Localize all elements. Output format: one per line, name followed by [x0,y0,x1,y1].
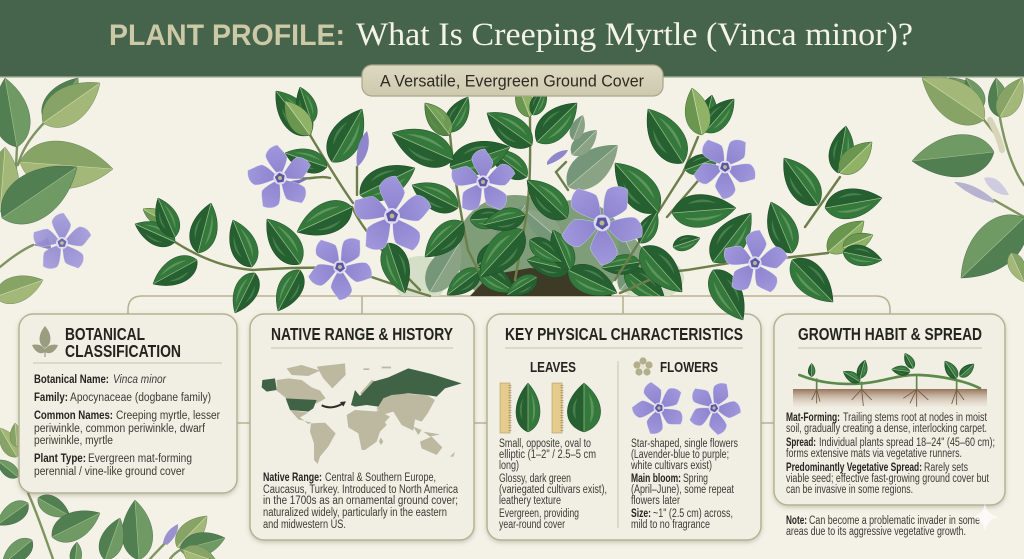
icon: leaf sprig [30,326,60,357]
text: leaves description: long) [499,460,519,472]
subheading: flowers: FLOWERS [660,359,718,376]
text: classification facts: Common Names: [34,410,113,422]
heading [65,324,181,361]
text: growth facts: can be invasive in some regions. [786,484,913,496]
text: flowers description: ~1" (2.5 cm) across, [653,508,733,520]
connector lines [128,296,890,423]
text: leaves description: Glossy, dark green [499,473,571,485]
subheading: leaves: LEAVES [530,359,576,376]
heading: CLASSIFICATION [65,341,181,361]
text: classification facts: Evergreen mat-forming [88,453,192,465]
panel: key physical characteristics [487,314,761,540]
title: PLANT PROFILE: [109,19,345,52]
text: classification facts: Family: [34,392,68,404]
text: flowers description: mild to no fragrance [631,519,710,531]
text: growth facts: Mat-Forming: [786,412,840,424]
text: leaves description: Small, opposite, oval to [499,438,591,450]
text: classification facts: Apocynaceae (dogbane family) [70,392,211,404]
text: classification facts: Creeping myrtle, lesser [116,410,220,422]
botanical sprig: top left [0,68,115,309]
upper left leaves [265,82,422,246]
text: native range: Central & Southern Europe, [325,472,436,484]
text: flowers description: white cultivars exist) [630,460,712,472]
leaves column [499,359,607,531]
note: areas due to its aggressive vegetative growth. [786,526,966,538]
text: leaves description: (variegated cultivars exist), [499,484,607,496]
note [786,515,980,538]
text: leaves description: leathery texture [499,495,561,507]
text: growth facts [786,412,995,496]
text: classification facts: Plant Type: [34,453,86,465]
world map [262,363,462,464]
text: growth facts: Predominantly Vegetative Spread: [786,462,922,474]
heading: NATIVE RANGE & HISTORY [271,324,453,344]
text: leaves description [499,438,607,531]
right branch leaves [602,85,885,328]
text: flowers description: (Lavender-blue to purple; [631,449,729,461]
arrow [322,401,346,407]
title: What Is Creeping Myrtle (Vinca minor)? [356,17,913,53]
text: growth facts: Rarely sets [924,462,968,474]
text: native range: Caucasus, Turkey. Introduced to North America [263,484,458,496]
text: classification facts: periwinkle, myrtle [34,435,113,447]
panel: botanical classification [19,314,237,493]
panel: growth habit and spread [774,314,1005,505]
text: growth facts: Trailing stems root at nodes in moist [843,412,988,424]
text: flowers description: Main bloom: [631,473,681,485]
text: native range: in the 1700s as an ornamental ground cover; [263,495,458,507]
periwinkle flowers [241,122,792,315]
text: native range: and midwestern US. [263,519,346,531]
text: flowers description [630,438,738,531]
icon: blossom [633,357,653,376]
panel: native range and history [250,314,474,540]
title [109,17,913,53]
flowers column [623,357,751,531]
icon: rulers and leaves [500,383,601,433]
sparkle [971,503,999,532]
text: leaves description: elliptic (1–2" / 2.5–5 cm [499,449,596,461]
stems [175,117,840,296]
text: classification facts: Botanical Name: [34,374,109,386]
left branch leaves [130,194,311,318]
text: native range: naturalized widely, particularly in the eastern [263,507,447,519]
text: flowers description: (April–June), some repeat [631,484,735,496]
text: native range [263,472,458,531]
text: growth facts: forms extensive mats via vegetative runners. [786,448,962,460]
text: classification facts [34,374,220,478]
heading: BOTANICAL [65,324,145,344]
botanical sprig: top right [910,62,1024,294]
text: flowers description: flowers later [631,495,680,507]
text: classification facts: perennial / vine-like ground cover [34,466,185,478]
dense foliage base [395,195,684,296]
text: flowers description: Size: [631,508,651,520]
heading: KEY PHYSICAL CHARACTERISTICS [505,324,743,344]
text: leaves description: year-round cover [499,519,565,531]
text: classification facts: periwinkle, common periwinkle, dwarf [34,423,206,435]
illustration: two flowers [623,371,751,445]
illustration: runner stem rooting in soil [793,351,987,407]
header band [0,0,1024,78]
text: classification facts: Vinca minor [113,374,167,386]
note: Note: [786,515,807,527]
text: flowers description: Star-shaped, single flowers [631,438,738,450]
subtitle pill [362,65,663,96]
central periwinkle plant illustration [130,82,885,334]
text: flowers description: Spring [683,473,708,485]
text: leaves description: Evergreen, providing [499,508,579,520]
text: growth facts: Spread: [786,437,816,449]
text: native range: Native Range: [263,472,322,484]
central leaves [375,82,629,297]
subtitle pill: A Versatile, Evergreen Ground Cover [380,72,644,90]
botanical sprig: bottom left [0,422,228,559]
